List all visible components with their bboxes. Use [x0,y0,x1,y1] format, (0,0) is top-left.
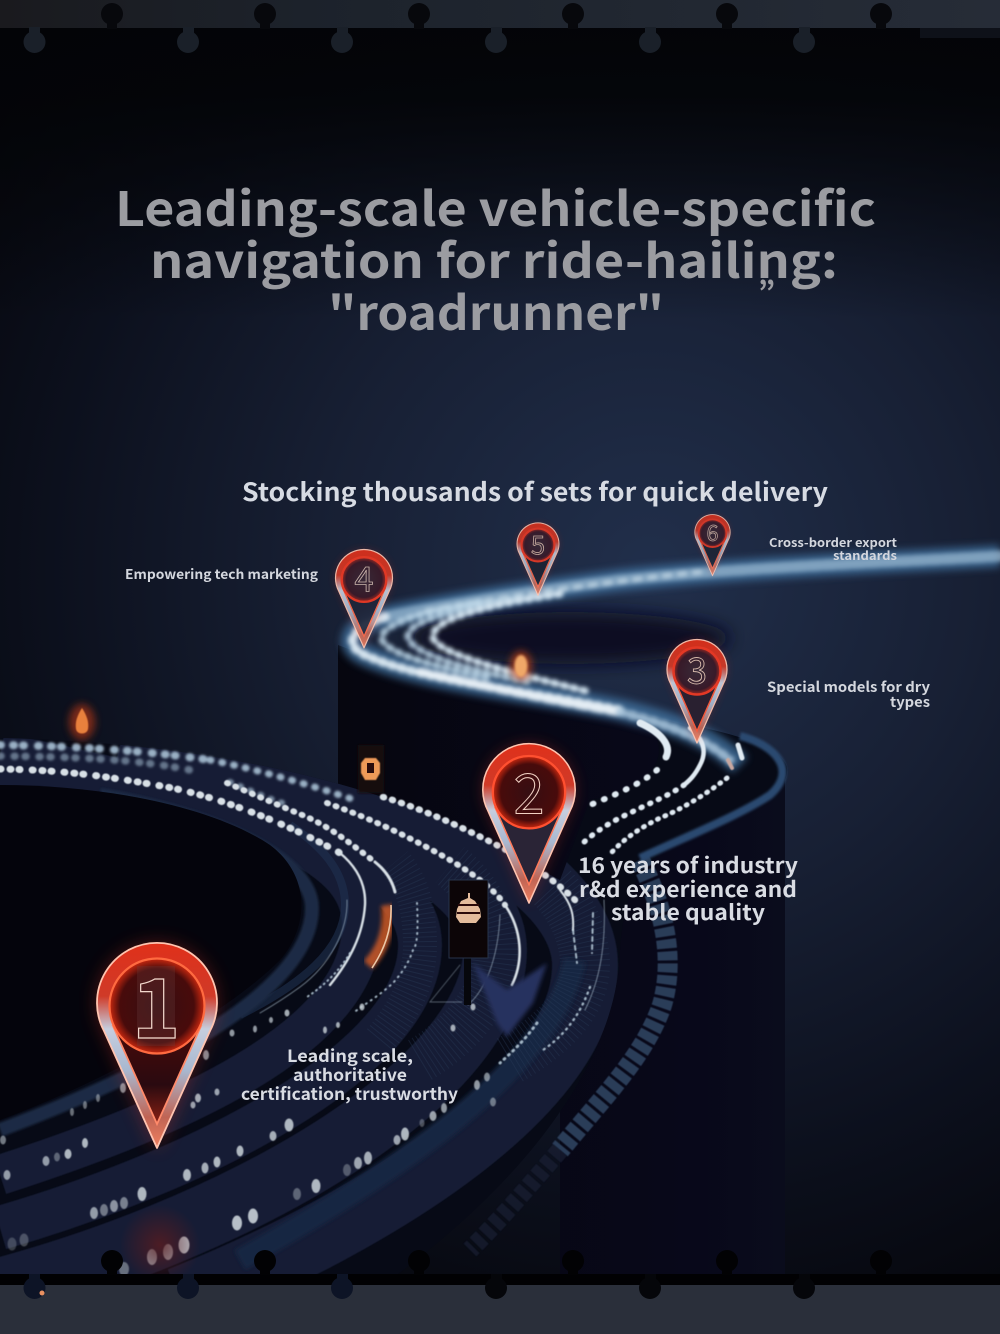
pin 6 [695,515,730,576]
pin 5 [517,523,559,595]
label: 16 years of industry: stable quality [611,896,766,927]
shadow inside upper bend [410,612,730,664]
icon: orange roadside beacon centre [510,651,532,681]
pin 5: 5 [531,526,545,562]
label: 16 years of industry: r&d experience and [579,873,797,904]
pin 4: 4 [355,551,373,601]
upper ribbon lights [352,556,1000,760]
label: Cross-border export standards: standards [833,547,897,564]
pin 2: 2 [514,750,544,830]
label: Cross-border export standards [769,534,897,564]
title: Leading-scale vehicle-specific [115,171,876,240]
striped outer road edge [470,860,668,1250]
pin 4 [336,550,392,648]
inner oval hollow rim [0,795,312,1130]
label: Cross-border export standards: Cross-border export [769,534,897,551]
icon: orange square road sign [358,745,384,793]
pin 1 [97,943,217,1150]
label: 16 years of industry [578,849,799,927]
heading: Stocking thousands of sets: Stocking thousands of sets for quick delivery [242,473,829,509]
pin 6: 6 [707,517,718,548]
label: Special models for dry types: types [890,692,930,712]
blue triangle reflection [473,963,547,1037]
pin 3: 3 [687,642,707,694]
upper ribbon glow [352,556,1000,765]
orange reflections [120,905,391,1285]
left curve bright lights [0,769,575,985]
icon: boat road sign [449,880,488,1005]
dark road wall [338,645,785,1280]
title: "roadrunner" [328,275,664,344]
label: Leading scale: certification, trustworthy [241,1080,458,1105]
title [115,171,876,344]
road lanes [0,745,585,1300]
label: Leading scale: Leading scale, [287,1042,413,1067]
road illustration [0,556,1000,1300]
label: Empowering tech marketing: Empowering tech marketing [125,563,318,583]
label: 16 years of industry: 16 years of industry [578,849,799,880]
right curve lights [583,723,742,852]
title: „ [758,250,775,294]
inner oval hollow [0,785,301,1120]
fine lane markers [260,900,604,1063]
icon: orange roadside beacon left [69,704,95,740]
pin 1: 1 [132,943,180,1062]
label: Leading scale [241,1042,458,1105]
pin 2 [483,744,575,903]
outer blue road rim [640,736,782,858]
label: Special models for dry types: Special models for dry [767,677,930,697]
title: navigation for ride-hailing: [150,223,838,292]
road body [0,725,787,1280]
bokeh road lights [0,1004,496,1276]
left curve dim lights [0,745,355,805]
label: Special models for dry types [767,677,930,712]
bottom puzzle edge band [0,1250,1000,1334]
pin 3 [667,639,727,743]
top puzzle edge band [0,0,1000,53]
label: Leading scale: authoritative [293,1061,407,1086]
